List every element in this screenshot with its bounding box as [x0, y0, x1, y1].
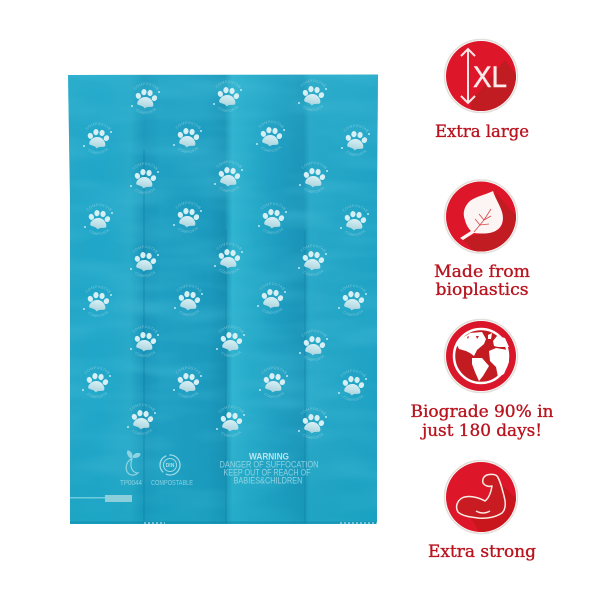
- paw pattern: COMPOSTABLE: [175, 366, 202, 384]
- paw pattern: COMPOSTABLE: [178, 227, 198, 234]
- paw pattern: COMPOSTABLE: [132, 246, 158, 253]
- paw pattern: COMPOSTABLE: [262, 146, 282, 152]
- paw pattern: COMPOSTABLE: [216, 242, 242, 250]
- paw pattern: COMPOSTABLE: [220, 186, 240, 192]
- paw pattern: COMPOSTABLE: [216, 80, 240, 88]
- paw pattern: COMPOSTABLE: [300, 80, 326, 87]
- paw pattern: COMPOSTABLE: [131, 417, 154, 436]
- paw pattern: COMPOSTABLE: [342, 204, 368, 212]
- paw pattern: COMPOSTABLE: [300, 244, 326, 252]
- paw pattern: COMPOSTABLE: [86, 286, 110, 293]
- paw pattern: COMPOSTABLE: [132, 162, 158, 170]
- paw pattern: COMPOSTABLE: [342, 383, 365, 402]
- paw pattern: COMPOSTABLE: [176, 122, 200, 129]
- icon: DIN certification ring: DIN: [166, 463, 175, 469]
- warning text: DANGER OF SUFFOCATION: [220, 460, 319, 470]
- paw pattern: COMPOSTABLE: [86, 122, 110, 130]
- paw pattern: COMPOSTABLE: [264, 228, 284, 234]
- panel: compostable bag: [68, 74, 378, 524]
- paw pattern: COMPOSTABLE: [176, 284, 202, 292]
- label: made from bioplastics: [434, 262, 530, 299]
- paw pattern: COMPOSTABLE: [301, 329, 328, 347]
- seal patch: [70, 495, 132, 502]
- paw pattern: COMPOSTABLE: [346, 150, 366, 156]
- panel: bioplastics feature: [434, 180, 530, 299]
- paw pattern: COMPOSTABLE: [86, 380, 109, 399]
- paw pattern: COMPOSTABLE: [220, 339, 243, 358]
- certification labels: TP0044: [120, 478, 142, 487]
- paw pattern: COMPOSTABLE: [84, 366, 111, 384]
- paw pattern: COMPOSTABLE: [132, 325, 159, 343]
- paw pattern: COMPOSTABLE: [302, 421, 325, 440]
- icon: globe badge: [444, 320, 518, 392]
- paw pattern: COMPOSTABLE: [342, 298, 365, 317]
- paw pattern: COMPOSTABLE: [304, 105, 324, 112]
- warning text: [220, 452, 319, 486]
- paw pattern: COMPOSTABLE: [263, 380, 286, 399]
- paw pattern: COMPOSTABLE: [304, 270, 324, 276]
- paw pattern: COMPOSTABLE: [88, 148, 108, 154]
- warning text: KEEP OUT OF REACH OF: [224, 468, 311, 479]
- paw pattern: COMPOSTABLE: [303, 343, 326, 362]
- paw pattern: COMPOSTABLE: [260, 282, 284, 290]
- label: made from bioplastics: Made from: [434, 262, 530, 281]
- paw pattern: COMPOSTABLE: [220, 268, 240, 274]
- certification labels: COMPOSTABLE: [151, 478, 193, 487]
- paw pattern: COMPOSTABLE: [344, 124, 368, 132]
- paw pattern: COMPOSTABLE: [134, 339, 157, 358]
- label: extra strong: Extra strong: [428, 542, 536, 561]
- paw pattern: COMPOSTABLE: [129, 403, 156, 421]
- paw pattern: COMPOSTABLE: [177, 380, 200, 399]
- warning text: WARNING: [249, 452, 289, 462]
- panel: extra large feature: [435, 40, 529, 141]
- paw pattern: COMPOSTABLE: [176, 202, 200, 209]
- panel: biograde feature: [410, 320, 554, 440]
- paw pattern: COMPOSTABLE: [90, 229, 110, 236]
- paw pattern: COMPOSTABLE: [134, 82, 158, 90]
- bag body: [60, 70, 385, 530]
- paw pattern: COMPOSTABLE: [304, 187, 324, 194]
- paw pattern: COMPOSTABLE: [262, 308, 282, 314]
- paw pattern: COMPOSTABLE: [136, 188, 156, 194]
- paw pattern: COMPOSTABLE: [218, 405, 245, 423]
- paw pattern: COMPOSTABLE: [86, 204, 112, 211]
- icon: leaf badge: [444, 180, 520, 253]
- paw pattern: COMPOSTABLE: [258, 120, 284, 128]
- label: biograde claim: just 180 days!: [420, 421, 542, 440]
- icon: seedling logo: [126, 451, 140, 475]
- warning text: BABIES&CHILDREN: [234, 476, 303, 486]
- label: biograde claim: [410, 402, 554, 440]
- paw pattern: COMPOSTABLE: [216, 160, 242, 168]
- paw pattern: COMPOSTABLE: [218, 325, 245, 343]
- paw pattern: COMPOSTABLE: [346, 230, 366, 236]
- paw pattern: COMPOSTABLE: [340, 369, 367, 387]
- label: made from bioplastics: bioplastics: [436, 280, 528, 299]
- icon: flexed arm badge: [444, 460, 520, 534]
- paw pattern: COMPOSTABLE: [220, 419, 243, 438]
- label: biograde claim: Biograde 90% in: [410, 402, 554, 421]
- icon: XL double arrow badge: XL: [473, 61, 507, 94]
- paw pattern: COMPOSTABLE: [261, 366, 288, 384]
- paw pattern: COMPOSTABLE: [260, 202, 286, 210]
- paw pattern: COMPOSTABLE: [180, 310, 200, 316]
- infographic canvas: [68, 38, 554, 561]
- certification labels: [120, 478, 193, 487]
- icon: DIN certification ring: [160, 455, 180, 475]
- paw pattern: [82, 80, 370, 440]
- paw pattern: COMPOSTABLE: [302, 162, 326, 169]
- paw pattern: COMPOSTABLE: [136, 108, 156, 114]
- panel: extra strong feature: [428, 460, 536, 561]
- paw pattern: COMPOSTABLE: [218, 106, 238, 112]
- paw pattern: COMPOSTABLE: [340, 284, 367, 302]
- paw pattern: COMPOSTABLE: [136, 271, 156, 278]
- label: extra large: Extra large: [435, 122, 529, 141]
- paw pattern: COMPOSTABLE: [178, 147, 198, 154]
- paw pattern: COMPOSTABLE: [300, 407, 327, 425]
- paw pattern: COMPOSTABLE: [88, 311, 108, 318]
